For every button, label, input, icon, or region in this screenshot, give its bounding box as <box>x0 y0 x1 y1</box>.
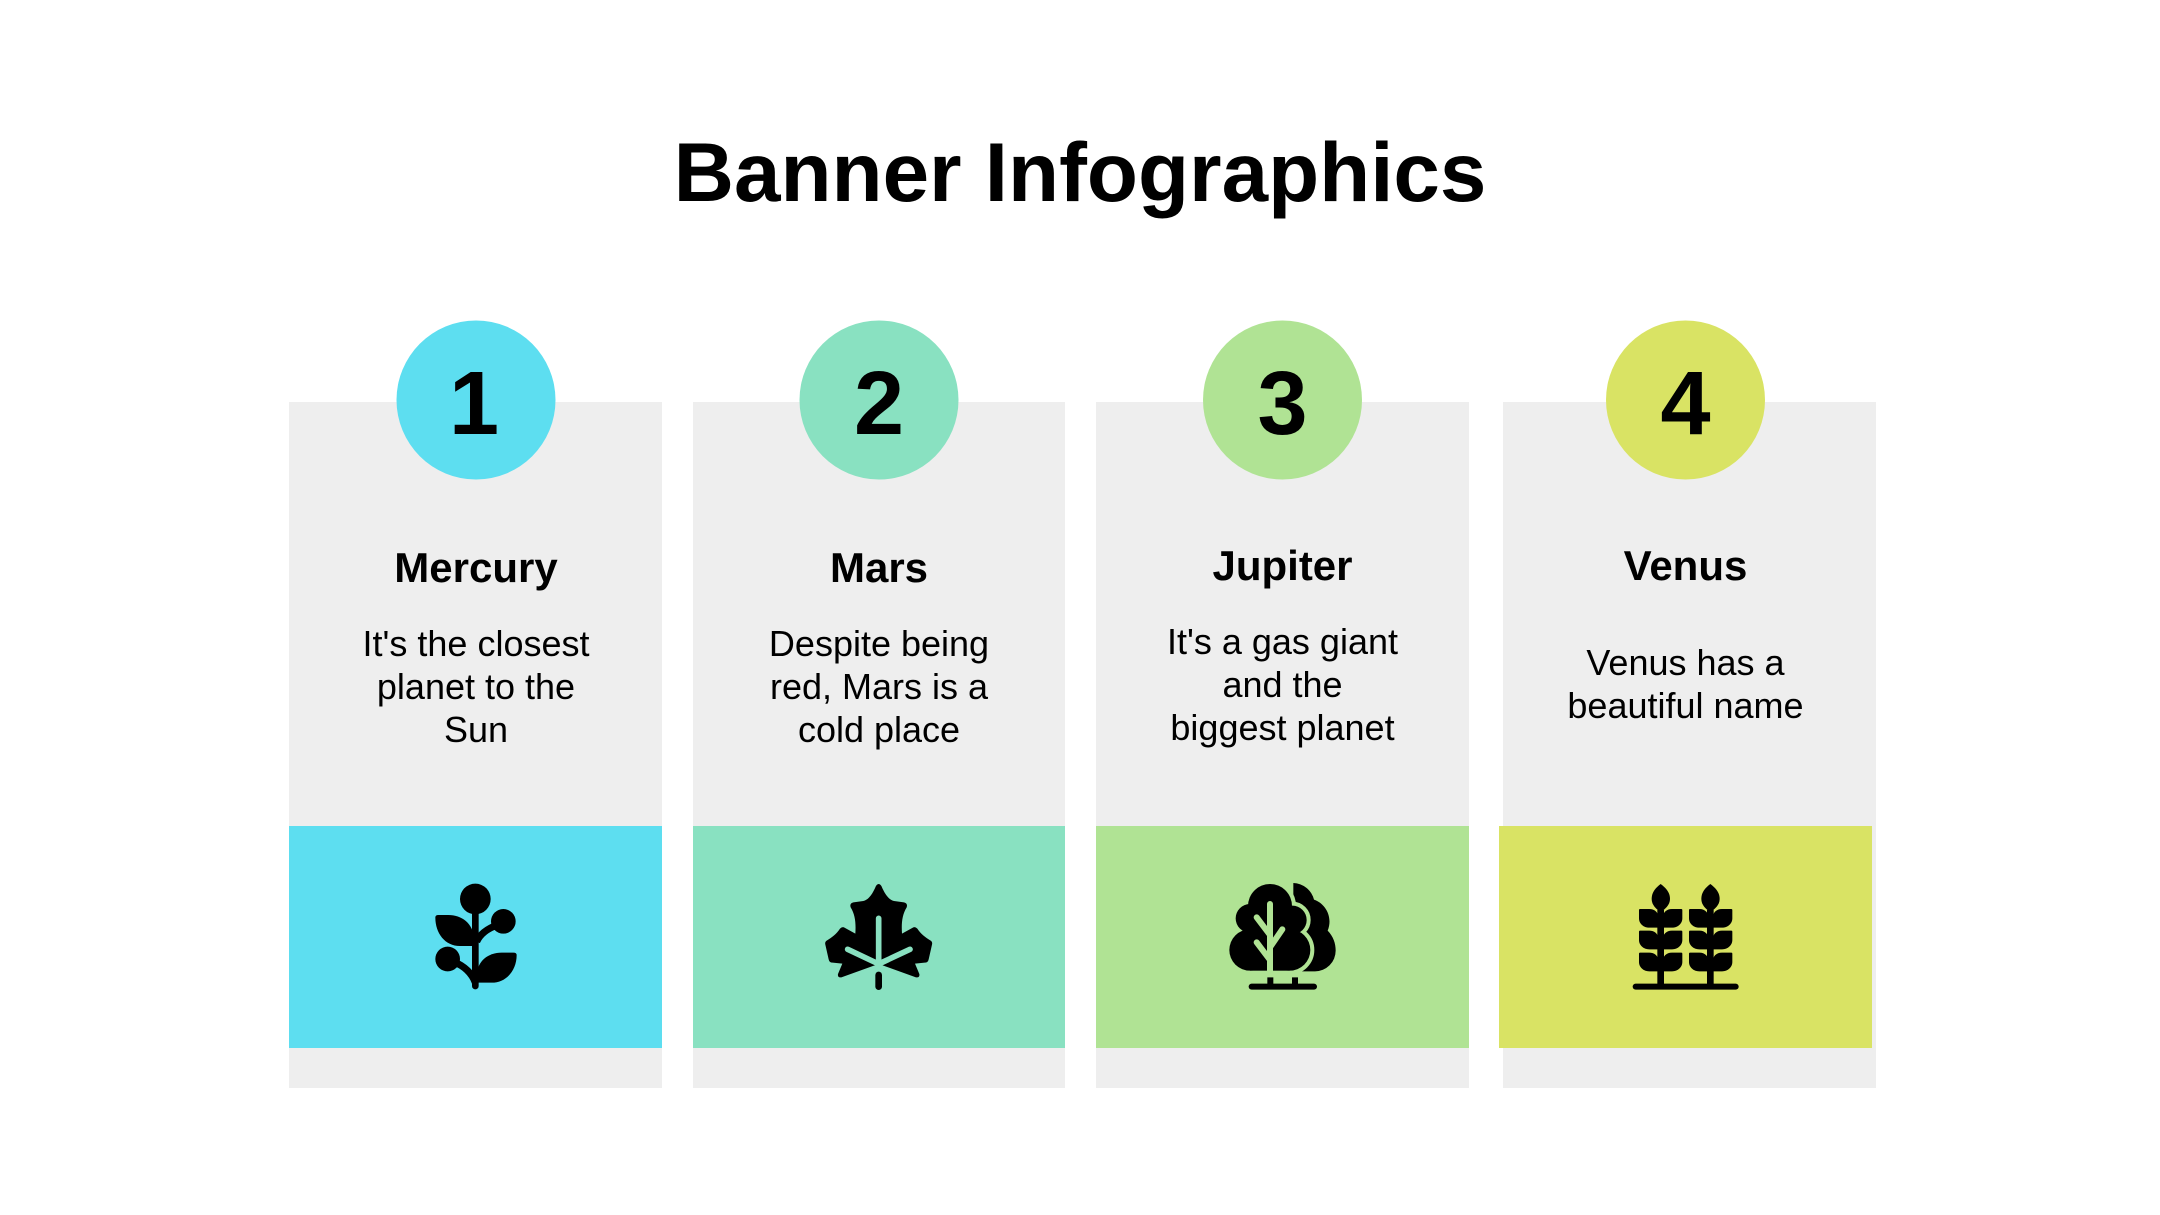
description: Mars <box>769 623 989 750</box>
icon: trees <box>1229 883 1336 987</box>
panel: Venus <box>1499 320 1876 1088</box>
description: Jupiter: biggest planet <box>1170 707 1395 748</box>
description: Venus: Venus has a <box>1586 642 1786 683</box>
description: Venus: beautiful name <box>1567 685 1804 726</box>
number badge 1 <box>396 320 556 480</box>
description: Mercury: planet to the <box>377 666 575 707</box>
number badge 3: 3 <box>1257 354 1308 454</box>
description: Jupiter: and the <box>1222 664 1343 705</box>
description: Mercury: Sun <box>444 709 508 750</box>
description: Venus <box>1567 642 1804 726</box>
description: Jupiter: It's a gas giant <box>1167 621 1398 662</box>
number badge 2 <box>800 320 958 480</box>
description: Mercury <box>363 623 589 750</box>
heading: Venus: Venus <box>1624 542 1747 589</box>
heading: Jupiter: Jupiter <box>1212 542 1353 589</box>
panel: Jupiter <box>1096 320 1469 1088</box>
panel: Mars <box>693 320 1065 1088</box>
heading: Mercury: Mercury <box>394 544 558 591</box>
panel: Mercury <box>289 320 662 1088</box>
icon: berry branch <box>435 884 517 986</box>
icon: maple leaf <box>825 884 932 987</box>
icon: wheat <box>1636 884 1736 987</box>
number badge 3 <box>1203 320 1362 480</box>
description: Mars: Despite being <box>769 623 989 664</box>
description: Mars: cold place <box>798 709 960 750</box>
colour band: Mars <box>693 826 1065 1048</box>
heading: Mars: Mars <box>830 544 928 591</box>
number badge 2: 2 <box>854 354 904 454</box>
number badge 1: 1 <box>449 354 499 454</box>
title: Banner Infographics <box>674 125 1486 219</box>
colour band: Mercury <box>289 826 662 1048</box>
description: Jupiter <box>1167 621 1398 748</box>
description: Mars: red, Mars is a <box>770 666 989 707</box>
description: Mercury: It's the closest <box>363 623 589 664</box>
number badge 4 <box>1606 320 1765 480</box>
colour band: Venus <box>1499 826 1872 1048</box>
colour band: Jupiter <box>1096 826 1469 1048</box>
number badge 4: 4 <box>1660 354 1711 454</box>
